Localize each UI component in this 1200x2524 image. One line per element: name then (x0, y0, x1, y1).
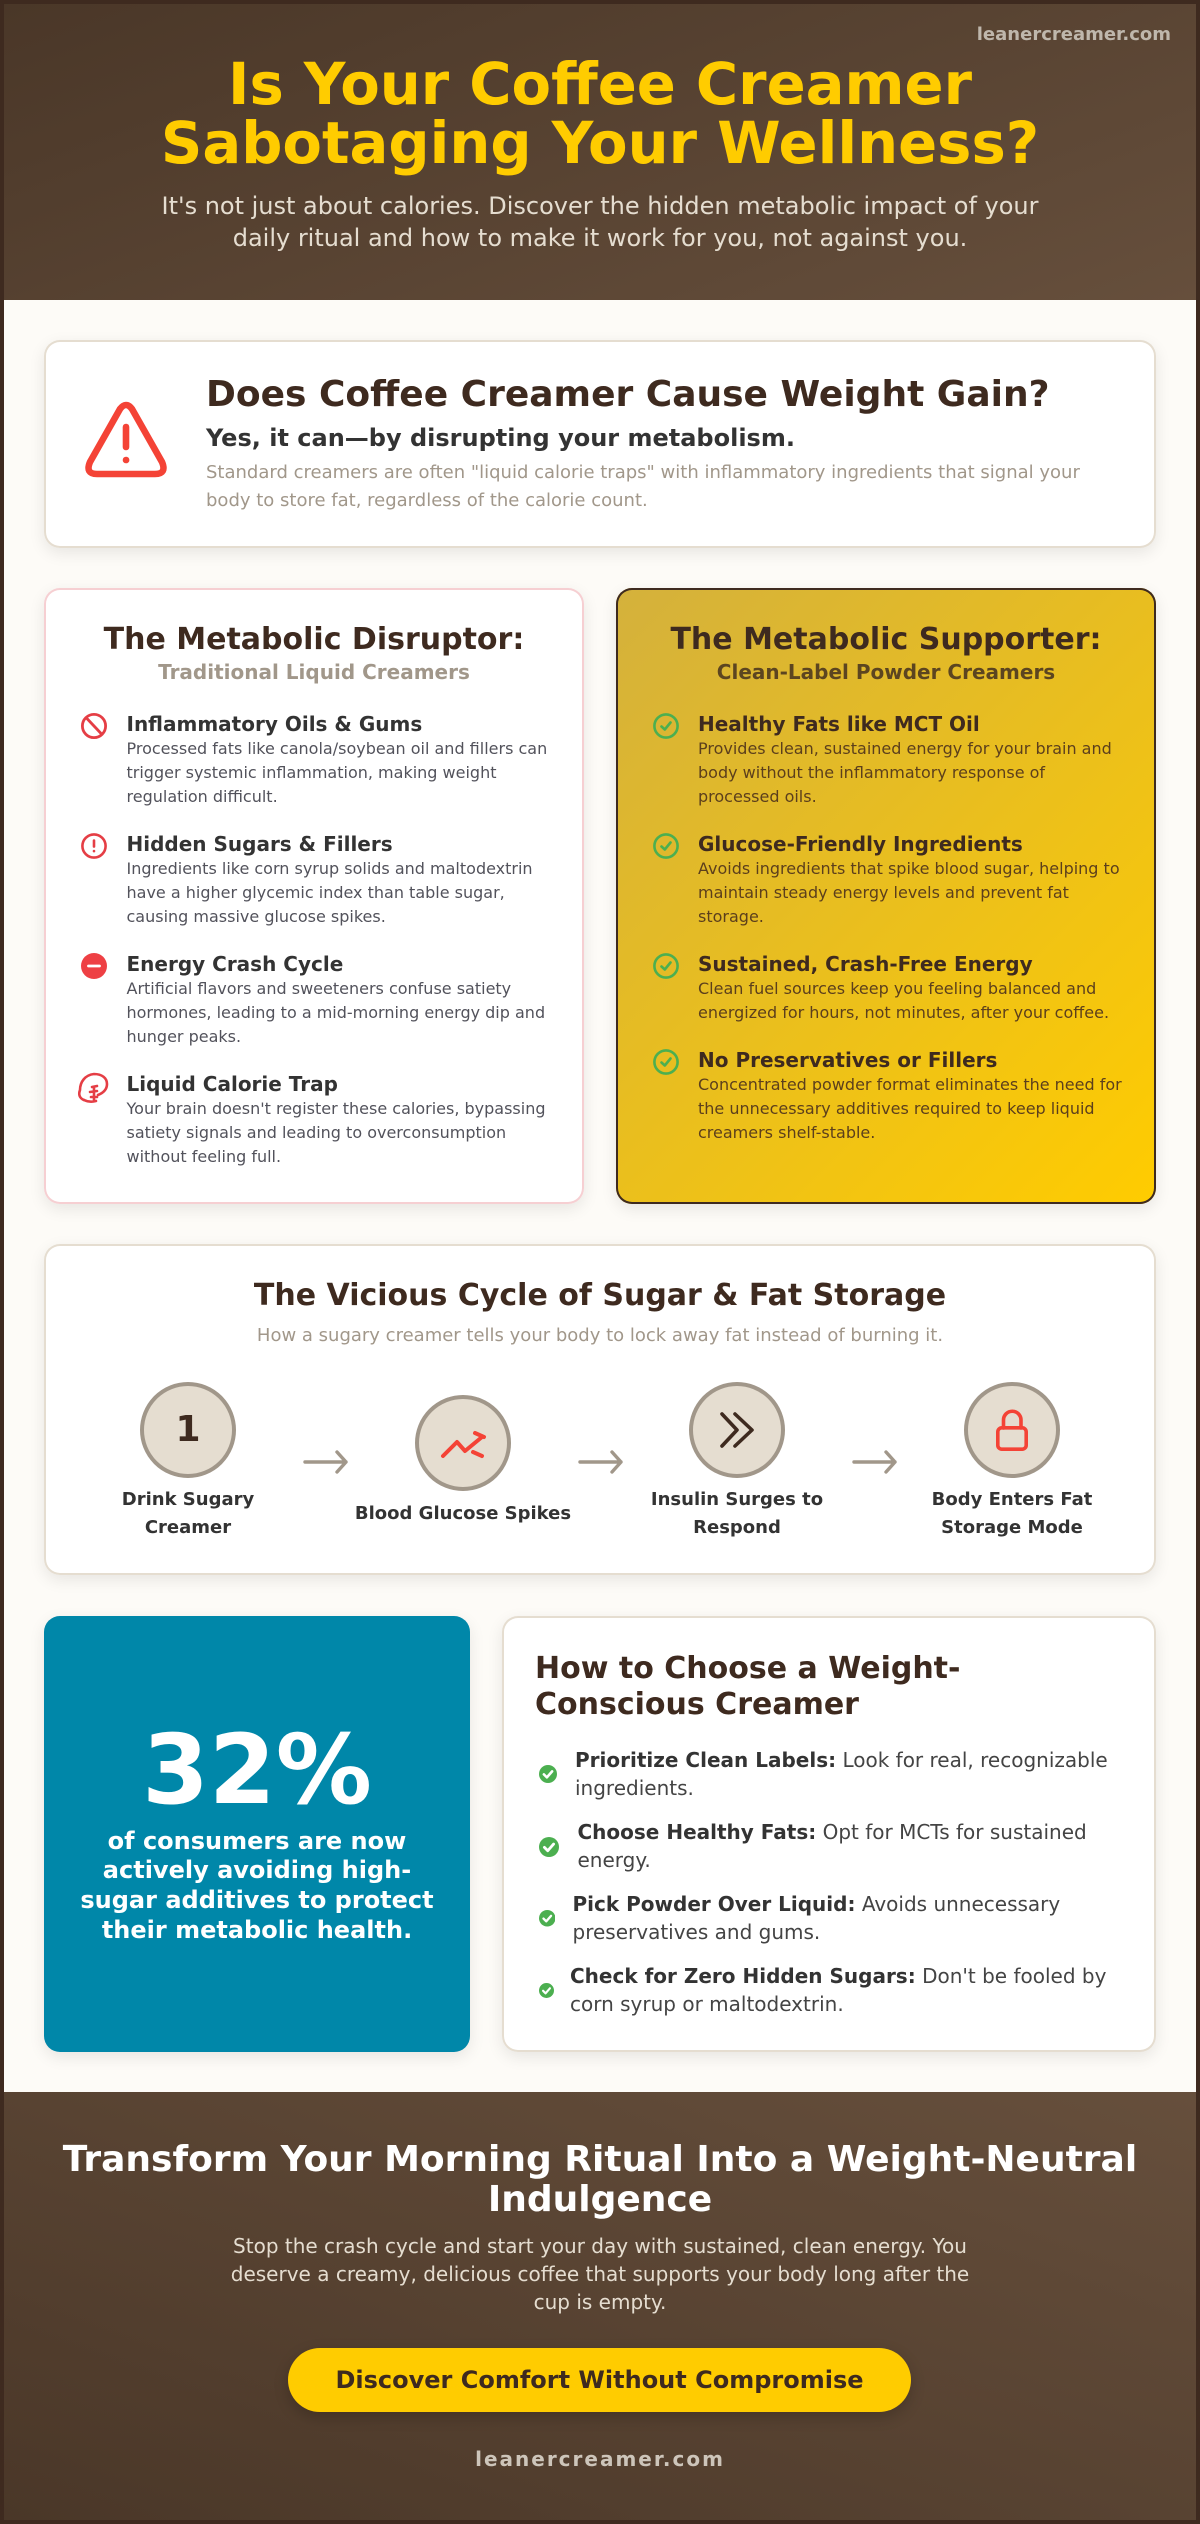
item text: causing massive glucose spikes. (126, 907, 386, 926)
tip text: Choose Healthy Fats: Opt for MCTs for sustained (578, 1820, 1087, 1844)
item text: creamers shelf-stable. (698, 1123, 875, 1142)
item text: Artificial flavors and sweeteners confuse satiety (126, 979, 511, 998)
tip text (570, 1962, 1106, 2018)
arrow (303, 1450, 348, 1474)
footer heading (4, 2140, 1196, 2220)
panel: metabolic supporter (616, 588, 1156, 1204)
icon: check (539, 1837, 559, 1857)
item text (698, 739, 1112, 806)
panel subheading: Clean-Label Powder Creamers (717, 660, 1055, 684)
item text: Your brain doesn't register these calories, bypassing (126, 1099, 546, 1118)
subtitle (161, 192, 1039, 252)
tip text: Pick Powder Over Liquid: Avoids unnecessary (572, 1892, 1060, 1916)
item text: maintain steady energy levels and prevent fat (698, 883, 1069, 902)
item title: No Preservatives or Fillers (698, 1048, 997, 1072)
tip 3 (503, 1890, 1156, 1947)
footer text: Stop the crash cycle and start your day with sustained, clean energy. You (233, 2234, 967, 2258)
statistic: 32% (142, 1714, 372, 1826)
item: healthy fats (653, 712, 1112, 806)
step badge: trend icon (414, 1395, 510, 1491)
item title: Liquid Calorie Trap (126, 1072, 338, 1096)
subtitle: daily ritual and how to make it work for you, not against you. (233, 224, 967, 252)
step badge: 1 (140, 1382, 236, 1478)
icon: check circle (653, 833, 679, 859)
item: glucose friendly (653, 832, 1120, 926)
arrow (852, 1450, 897, 1474)
answer: Yes, it can—by disrupting your metabolism. (206, 424, 795, 452)
item: hidden sugars (81, 832, 533, 926)
tip text: Check for Zero Hidden Sugars: Don't be fooled by (570, 1964, 1106, 1988)
section heading: The Vicious Cycle of Sugar & Fat Storage (254, 1278, 946, 1313)
tip 2 (503, 1818, 1156, 1875)
step 1 (122, 1382, 254, 1538)
panel subheading: Traditional Liquid Creamers (158, 660, 470, 684)
explanation: body to store fat, regardless of the calorie count. (206, 490, 648, 510)
item text: the unnecessary additives required to keep liquid (698, 1099, 1095, 1118)
icon: check (538, 1910, 555, 1926)
main background (4, 300, 1196, 2092)
item text: satiety signals and leading to overconsumption (126, 1123, 506, 1142)
step 4 (932, 1382, 1092, 1538)
step 3 (651, 1382, 823, 1538)
tip 4 (503, 1962, 1156, 2019)
tip 1 (503, 1746, 1156, 1803)
statistic caption: actively avoiding high- (103, 1856, 411, 1884)
step badge: lock icon (964, 1382, 1060, 1478)
item text: hormones, leading to a mid-morning energy dip and (126, 1003, 545, 1022)
item text: Avoids ingredients that spike blood sugar, helping to (698, 859, 1120, 878)
item: inflammatory oils (81, 712, 547, 806)
item text: regulation difficult. (126, 787, 278, 806)
step badge: 1: 1 (175, 1409, 201, 1450)
icon: brain trap (78, 1072, 108, 1103)
panel heading: The Metabolic Disruptor: (104, 622, 524, 657)
step label: Drink Sugary (122, 1489, 254, 1510)
item text: Clean fuel sources keep you feeling balanced and (698, 979, 1096, 998)
item title: Sustained, Crash-Free Energy (698, 952, 1033, 976)
footer text: deserve a creamy, delicious coffee that supports your body long after the (231, 2262, 969, 2286)
tip text (578, 1818, 1087, 1874)
icon: alert circle (81, 833, 107, 859)
explanation: Standard creamers are often "liquid calorie traps" with inflammatory ingredients that signal your (206, 462, 1080, 482)
tip text: preservatives and gums. (572, 1920, 820, 1944)
section subtitle: How a sugary creamer tells your body to lock away fat instead of burning it. (257, 1325, 943, 1346)
title (161, 50, 1039, 176)
step label (122, 1489, 254, 1538)
item text: Concentrated powder format eliminates the need for (698, 1075, 1122, 1094)
heading: How to Choose a Weight- (535, 1650, 960, 1686)
step label: Creamer (145, 1517, 231, 1538)
footer heading: Indulgence (488, 2179, 712, 2220)
item: no preservatives (653, 1048, 1122, 1142)
icon: warning triangle (85, 402, 167, 478)
step 2 (355, 1395, 571, 1524)
item text (126, 859, 533, 926)
statistic caption (80, 1826, 434, 1944)
item text: Processed fats like canola/soybean oil and fillers can (126, 739, 547, 758)
footer (4, 2092, 1196, 2520)
panel: weight gain answer (44, 340, 1156, 548)
item text: processed oils. (698, 787, 817, 806)
tip text (575, 1746, 1108, 1802)
step label (932, 1489, 1092, 1538)
footer heading: Transform Your Morning Ritual Into a Weight-Neutral (63, 2139, 1137, 2180)
item text: storage. (698, 907, 764, 926)
footer brand: leanercreamer.com (475, 2447, 725, 2471)
item text (698, 979, 1109, 1022)
call to action button: Discover Comfort Without Compromise (335, 2366, 864, 2394)
brand: leanercreamer.com (977, 24, 1171, 45)
item text: Provides clean, sustained energy for your brain and (698, 739, 1112, 758)
heading: Does Coffee Creamer Cause Weight Gain? (206, 374, 1050, 415)
call to action button (288, 2348, 911, 2412)
item title: Glucose-Friendly Ingredients (698, 832, 1023, 856)
item text (698, 859, 1120, 926)
subtitle: It's not just about calories. Discover the hidden metabolic impact of your (161, 192, 1039, 220)
panel heading: The Metabolic Supporter: (670, 622, 1102, 657)
panel: vicious cycle (44, 1244, 1156, 1575)
step label: Storage Mode (941, 1517, 1083, 1538)
item title: Energy Crash Cycle (126, 952, 343, 976)
step label: Insulin Surges to (651, 1489, 823, 1510)
step label: Body Enters Fat (932, 1489, 1092, 1510)
item text (126, 739, 547, 806)
title: Is Your Coffee Creamer (228, 50, 972, 118)
item text: body without the inflammatory response of (698, 763, 1045, 782)
icon: check circle (653, 953, 679, 979)
tip text: Prioritize Clean Labels: Look for real, recognizable (575, 1748, 1108, 1772)
item text: Ingredients like corn syrup solids and maltodextrin (126, 859, 533, 878)
icon: ban (81, 713, 107, 739)
item title: Healthy Fats like MCT Oil (698, 712, 980, 736)
step label: Blood Glucose Spikes (355, 1503, 571, 1524)
icon: check circle (653, 713, 679, 739)
panel: how to choose (502, 1616, 1156, 2052)
step badge: chevrons icon (689, 1382, 785, 1478)
item text (126, 1099, 546, 1166)
tip text: energy. (578, 1848, 651, 1872)
step label: Respond (693, 1517, 781, 1538)
icon: check (539, 1765, 557, 1783)
item text (698, 1075, 1122, 1142)
statistic caption: sugar additives to protect (80, 1886, 434, 1914)
title: Sabotaging Your Wellness? (161, 110, 1039, 176)
tip text: ingredients. (575, 1776, 694, 1800)
step label (651, 1489, 823, 1538)
item text: hunger peaks. (126, 1027, 241, 1046)
stat card (44, 1616, 470, 2052)
item title: Hidden Sugars & Fillers (126, 832, 393, 856)
panel: metabolic disruptor (44, 588, 584, 1204)
statistic caption: of consumers are now (108, 1826, 406, 1854)
header (4, 4, 1196, 300)
icon: check circle (653, 1049, 679, 1075)
item text: without feeling full. (126, 1147, 281, 1166)
icon: check (538, 1983, 554, 1998)
item text: have a higher glycemic index than table sugar, (126, 883, 505, 902)
tip text: corn syrup or maltodextrin. (570, 1992, 844, 2016)
arrow (578, 1450, 623, 1474)
heading (535, 1650, 960, 1722)
item: sustained energy (653, 952, 1109, 1022)
heading: Conscious Creamer (535, 1686, 859, 1722)
footer text: cup is empty. (534, 2290, 666, 2314)
item text: energized for hours, not minutes, after your coffee. (698, 1003, 1109, 1022)
item title: Inflammatory Oils & Gums (126, 712, 422, 736)
item text: trigger systemic inflammation, making weight (126, 763, 496, 782)
footer text (4, 2232, 1196, 2316)
item text (126, 979, 545, 1046)
statistic caption: their metabolic health. (102, 1916, 412, 1944)
explanation (206, 462, 1080, 510)
item: energy crash (81, 952, 545, 1046)
icon: minus circle (81, 953, 107, 979)
item: liquid calorie trap (78, 1072, 546, 1166)
tip text (572, 1890, 1060, 1946)
